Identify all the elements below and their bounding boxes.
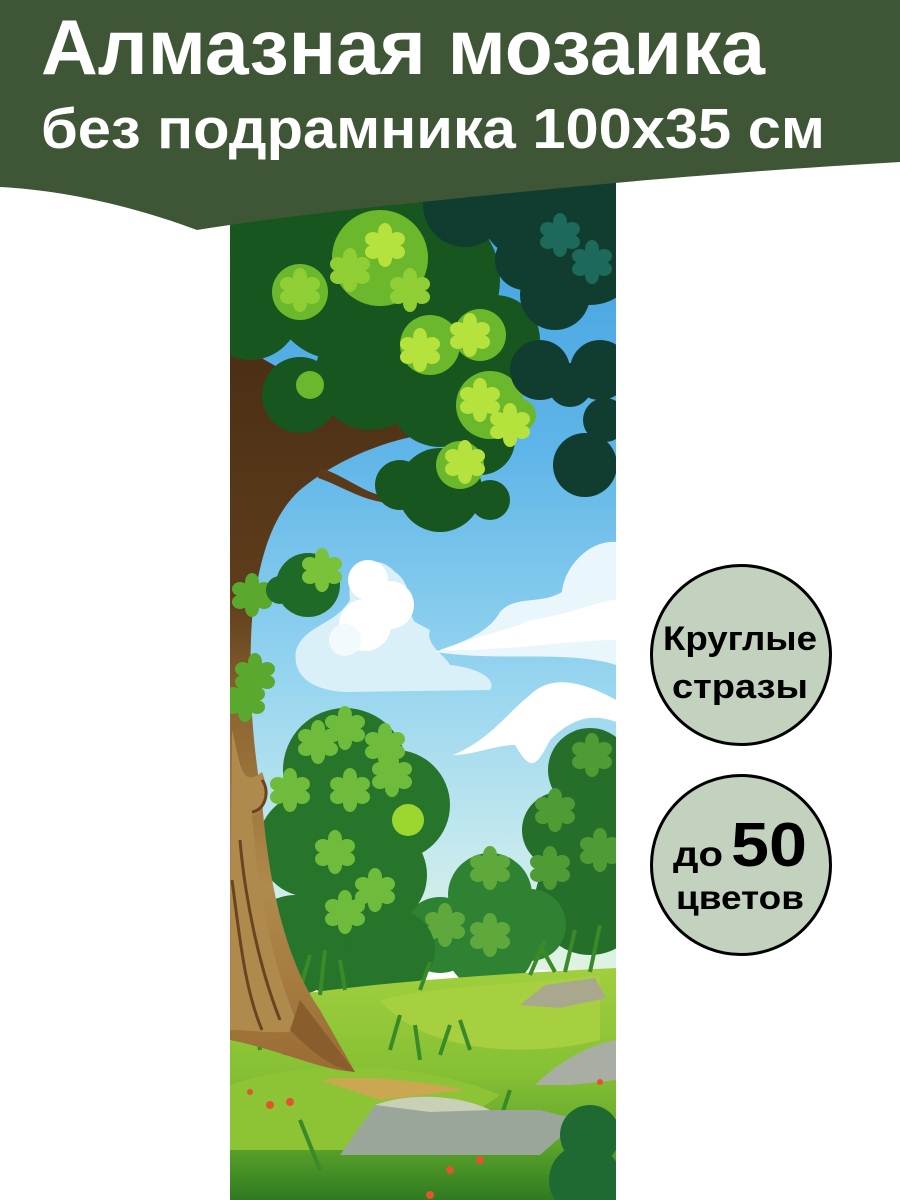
rocks [520,978,606,1008]
sky [250,239,616,970]
large bush left [264,708,450,993]
badge: up to 50 colours: до [673,835,723,874]
flowers [247,1079,603,1199]
illustration: forest landscape with tree [230,182,616,1200]
bottom right bush [549,1105,621,1200]
title: Алмазная мозаика [41,3,766,91]
canopy bright [272,210,536,489]
badge: up to 50 colours: цветов [676,879,804,916]
canopy dark [230,202,540,532]
header banner [0,0,900,230]
side branch foliage [266,553,340,617]
badge: round rhinestones: стразы [672,668,808,706]
tree trunk [230,340,420,1072]
badge: up to 50 colours: 50 [731,811,807,880]
bush center background [410,854,566,978]
title: без подрамника 100х35 см [41,97,825,161]
badge: round rhinestones: Круглые [663,620,817,658]
badge: up to 50 colours [652,776,830,954]
bush right background [522,728,616,955]
leaf patch on trunk [225,573,275,722]
title [41,3,825,161]
grass blades [255,925,600,1170]
badge: round rhinestones [652,566,830,744]
ground [230,968,616,1200]
canopy very dark right [423,182,616,497]
clouds [295,542,616,763]
